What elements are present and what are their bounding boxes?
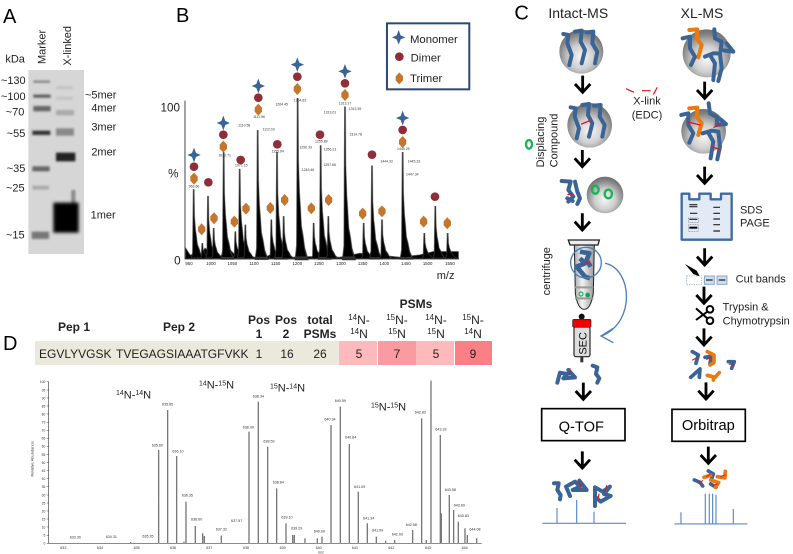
peak labels: 1445.25 (397, 147, 410, 151)
peak labels: 643.33 (435, 428, 447, 432)
peak labels: 635.60 (152, 444, 163, 448)
axis labels: 0 (174, 254, 181, 267)
table header: total (307, 313, 333, 327)
peak labels: 1257.66 (323, 163, 336, 167)
table row: EGVLYVGSK (39, 347, 111, 361)
cut bands: Cut bands (736, 273, 786, 285)
table row: TVEGAGSIAAATGFVKK (116, 347, 248, 361)
molecular weight labels (1, 75, 26, 242)
isotope column headers: N (397, 327, 406, 341)
axis labels: 1350 (358, 261, 368, 266)
y axis: 65 (42, 437, 45, 441)
peak labels: 638.09 (243, 425, 254, 429)
peak labels: 639.29 (291, 526, 302, 530)
digested peptides (691, 352, 734, 380)
peak labels: 1445.33 (408, 160, 420, 164)
Orbitrap spectrum (674, 494, 747, 524)
y axis: 0 (43, 542, 45, 546)
table header: Pos (275, 313, 297, 327)
isotope label 14N-14N: 14 (116, 390, 124, 397)
axis labels: % (168, 168, 179, 181)
peak labels: 638.59 (263, 440, 275, 444)
peak labels (189, 98, 420, 189)
gel image: kDa (5, 53, 26, 65)
x ticks: 634 (97, 546, 103, 550)
intact result proteins (554, 481, 611, 506)
separated proteins (557, 366, 599, 383)
table row (35, 341, 492, 365)
y axis: 90 (42, 396, 45, 400)
table row: 5 (433, 347, 440, 361)
column titles: XL-MS (681, 5, 723, 21)
peak labels: 640.84 (345, 436, 356, 440)
peak labels: 636.35 (182, 494, 193, 498)
axis labels (161, 102, 455, 282)
y axis: 60 (42, 445, 45, 449)
peak labels: 1032.71 (218, 154, 231, 158)
arrows (575, 287, 716, 468)
peaks (131, 410, 221, 543)
peak labels: 1112.03 (263, 128, 275, 132)
SDS PAGE and cut bands: SDS (740, 204, 763, 216)
heading A: A (3, 6, 17, 28)
oligomer labels: 4mer (91, 102, 117, 114)
isotope label 15N-15N: 15 (371, 402, 379, 409)
axis labels: 1550 (445, 261, 455, 266)
baseline and x ticks: 639 (280, 546, 286, 550)
table header: 2 (283, 327, 290, 341)
table header: 1 (256, 327, 263, 341)
table header: Pos (248, 313, 270, 327)
isotope label 15N-14N: N- (278, 383, 290, 395)
isotope label 15N-14N: 14 (289, 383, 297, 390)
peak labels: 642.58 (406, 523, 417, 527)
peak labels: 1204.83 (294, 98, 306, 102)
centrifuge label: centrifuge (541, 247, 553, 295)
centrifuge tube and SEC column (541, 240, 626, 362)
y axis: 85 (42, 404, 45, 408)
peak labels: 1256.21 (324, 148, 336, 152)
y axis: 35 (42, 485, 45, 489)
oligomer labels: 2mer (91, 147, 117, 159)
isotope column headers: 15 (462, 313, 472, 322)
peak labels: 1111.96 (253, 115, 265, 119)
column titles (548, 5, 723, 21)
isotope column headers: 15 (388, 327, 398, 336)
arrows (575, 76, 712, 265)
legend: Trimer (410, 73, 442, 85)
y axis: Relative Abundance (30, 440, 35, 477)
axis labels: 1000 (206, 261, 216, 266)
x ticks: 635 (134, 546, 140, 550)
isotope column headers: 15 (386, 313, 396, 322)
peak labels: 639.10 (281, 516, 293, 520)
X-link label: X-link (633, 95, 661, 107)
oligomer labels: 3mer (91, 121, 117, 133)
peak labels: 643.58 (445, 488, 456, 492)
isotope column headers: 14 (350, 327, 360, 336)
legend: Monomer (410, 34, 458, 46)
table row: 1 (256, 347, 263, 361)
panel C: workflow bottom (542, 287, 790, 524)
axis labels: m/z (437, 270, 454, 282)
peak labels: 635.85 (162, 402, 173, 406)
peak labels: 1155.04 (271, 149, 284, 153)
gel image (1, 26, 117, 254)
peak labels: 637.57 (231, 519, 242, 523)
peak labels: 643.69 (454, 503, 465, 507)
baseline and x ticks: 642 (388, 546, 394, 550)
gel image: X-linked (62, 26, 74, 66)
peak labels: 963.66 (189, 185, 199, 189)
Q-TOF spectrum (542, 500, 626, 523)
peak labels: 1313.35 (349, 107, 361, 111)
axis labels: 1450 (401, 261, 411, 266)
panel C: workflow bottom: Chymotrypsin (723, 315, 790, 327)
peak labels: 1249.46 (302, 168, 314, 172)
isotope column headers: N- (434, 313, 447, 327)
XL result peptides (694, 471, 725, 487)
axis labels: 950 (185, 261, 193, 266)
isotope column headers: N- (395, 313, 408, 327)
y axis: 30 (42, 493, 45, 497)
peak labels: 1444.32 (380, 160, 393, 164)
molecular weight labels: ~100 (1, 91, 26, 103)
y axis: 45 (42, 469, 45, 473)
y axis: 80 (42, 412, 45, 416)
oligomer markers (187, 57, 451, 235)
y axis: 95 (42, 388, 45, 392)
isotope column headers: N (473, 327, 482, 341)
table row: 26 (313, 347, 327, 361)
isotope label 15N-15N: 15 (390, 402, 398, 409)
panel D heading: D (3, 333, 17, 355)
SEC column: SEC (578, 332, 590, 355)
gel image: Marker (36, 29, 48, 64)
peak labels (70, 402, 242, 539)
scissors icon (696, 306, 713, 324)
panel A: gel (1, 6, 117, 254)
axis labels: 1050 (228, 261, 238, 266)
peak labels: 1110.58 (238, 123, 250, 127)
y axis: 15 (42, 517, 45, 521)
y axis: 75 (42, 421, 45, 425)
isotope column headers: N- (471, 313, 484, 327)
isotope label 15N-15N: N (398, 402, 406, 414)
molecular weight labels: ~25 (6, 183, 25, 195)
x ticks: 633 (60, 546, 66, 550)
baseline and x ticks (240, 543, 482, 554)
isotope label 14N-15N: 15 (218, 380, 226, 387)
heading C: C (514, 2, 529, 24)
displacing compound label: Displacing (535, 117, 547, 167)
isotope label 14N-14N: N (143, 389, 151, 401)
gel icon (682, 194, 732, 240)
spectrum peaks (186, 100, 458, 258)
curved transfer arrow (601, 263, 626, 343)
baseline and x ticks: 641 (352, 546, 358, 550)
MS/MS spectrum right part (240, 381, 482, 554)
intact spheres and proteins (559, 30, 623, 213)
isotope column headers: N- (357, 313, 370, 327)
y axis: 40 (42, 477, 45, 481)
displacing compound label (526, 114, 560, 167)
peak labels: 642.09 (392, 533, 403, 537)
axis labels: 1200 (292, 261, 303, 266)
table row: 7 (394, 347, 401, 361)
table row: 9 (470, 347, 477, 361)
axis labels: 1100 (249, 261, 259, 266)
isotope label 14N-14N: N- (124, 389, 136, 401)
molecular weight labels: ~15 (6, 230, 25, 242)
peak labels: 1447.34 (406, 173, 419, 177)
peak labels: 636.10 (172, 450, 184, 454)
SDS PAGE and cut bands: PAGE (740, 218, 770, 230)
isotope label 14N-15N: N (226, 380, 234, 392)
oligomer labels: ~5mer (85, 90, 117, 102)
peak labels: 641.59 (372, 528, 383, 532)
peak labels: 640.59 (335, 399, 346, 403)
Orbitrap box: Orbitrap (682, 418, 735, 434)
baseline and x ticks: 644 (462, 546, 468, 550)
molecular weight labels: ~55 (7, 128, 25, 140)
table header: PSMs (304, 327, 337, 341)
table header: PSMs (400, 297, 433, 311)
peak labels: 636.60 (191, 518, 202, 522)
isotope label 14N-14N: 14 (135, 390, 143, 397)
axis labels: 1250 (314, 261, 324, 266)
baseline and x ticks: 643 (425, 546, 431, 550)
isotope column headers: N (436, 327, 445, 341)
axis labels: 100 (161, 102, 181, 115)
x ticks: 636 (170, 546, 176, 550)
molecular weight labels: ~130 (1, 75, 26, 87)
y axis: 100 (40, 380, 45, 384)
peak labels: 1313.01 (324, 111, 336, 115)
isotope column headers: 14 (348, 313, 358, 322)
baseline and x ticks: 640 (316, 546, 322, 550)
axes (185, 101, 459, 259)
y axis (30, 380, 240, 546)
peak labels: 641.34 (363, 517, 374, 521)
peak labels: 643.83 (458, 514, 469, 518)
isotope column headers: N (359, 327, 368, 341)
oligomer labels: 1mer (91, 209, 116, 221)
Orbitrap box (672, 409, 745, 441)
table header (58, 297, 433, 341)
y axis: 55 (42, 453, 45, 457)
y axis: 5 (43, 534, 45, 538)
X-link label: (EDC) (632, 109, 662, 121)
axis labels: 1400 (379, 261, 390, 266)
panel B: mass spectrum (161, 5, 469, 282)
peak labels: 1255.89 (315, 140, 328, 144)
peak labels: 641.09 (354, 485, 365, 489)
peak labels: 633.30 (70, 535, 81, 539)
peak labels: 640.34 (324, 418, 336, 422)
table header: Pep 2 (163, 320, 195, 334)
tube (568, 240, 601, 309)
isotope label 15N-15N: N- (379, 402, 391, 414)
Q-TOF box (542, 409, 625, 441)
x ticks: 637 (206, 546, 212, 550)
legend (387, 23, 469, 89)
baseline and x ticks: 638 (243, 546, 249, 550)
isotope column headers: 14 (425, 313, 435, 322)
peak labels (243, 394, 481, 537)
isotope label 14N-15N: N- (207, 380, 219, 392)
peak labels: 638.84 (273, 480, 284, 484)
crosslink table (35, 297, 492, 365)
peak labels: 642.83 (415, 410, 426, 414)
oligomer labels (85, 90, 117, 221)
peak labels: 637.32 (216, 528, 227, 532)
y axis: 25 (42, 501, 45, 505)
x ticks (60, 546, 212, 550)
XL spheres and proteins (681, 29, 733, 159)
table header: Pep 1 (58, 320, 90, 334)
molecular weight labels: ~70 (6, 106, 24, 118)
molecular weight labels: ~35 (7, 163, 25, 175)
X-link label (626, 87, 662, 121)
peak labels: 1250.33 (299, 146, 312, 150)
peak labels: 1071.15 (235, 163, 248, 167)
axis labels: 1500 (423, 261, 433, 266)
y axis: 50 (42, 461, 45, 465)
peaks (249, 381, 477, 543)
axis labels: 1300 (336, 261, 346, 266)
isotope label 14N-15N: 14 (199, 380, 207, 387)
isotope label 15N-14N: 15 (270, 383, 278, 390)
peak labels: 1314.78 (349, 132, 362, 136)
peak labels: 1204.45 (275, 103, 288, 107)
axis labels: 1150 (271, 261, 281, 266)
peak labels: 635.35 (142, 535, 154, 539)
isotope column headers: 15 (427, 327, 437, 336)
column titles: Intact-MS (548, 5, 608, 21)
isotope column headers: 14 (464, 327, 474, 336)
SDS PAGE and cut bands (682, 194, 786, 285)
table row: 5 (356, 347, 363, 361)
displacing compound label: Compound (548, 114, 560, 167)
y axis: 20 (42, 509, 45, 513)
y axis: 70 (42, 429, 45, 433)
table row: 16 (280, 347, 294, 361)
peak labels: 1313.17 (339, 102, 351, 106)
peak labels: 638.34 (253, 394, 264, 398)
digest label: Trypsin & (723, 302, 769, 314)
peak labels: 640.09 (314, 530, 325, 534)
MS/MS spectrum left part (30, 380, 242, 550)
heading B: B (176, 5, 189, 27)
panel C: workflow top (514, 2, 733, 265)
y axis: 10 (42, 525, 45, 529)
isotope column headers (348, 313, 484, 341)
Q-TOF box: Q-TOF (559, 419, 604, 435)
legend: Dimer (411, 53, 441, 65)
peak labels: 634.31 (106, 535, 117, 539)
isotope label 15N-14N: N (297, 383, 305, 395)
peak labels: 644.08 (469, 528, 481, 532)
